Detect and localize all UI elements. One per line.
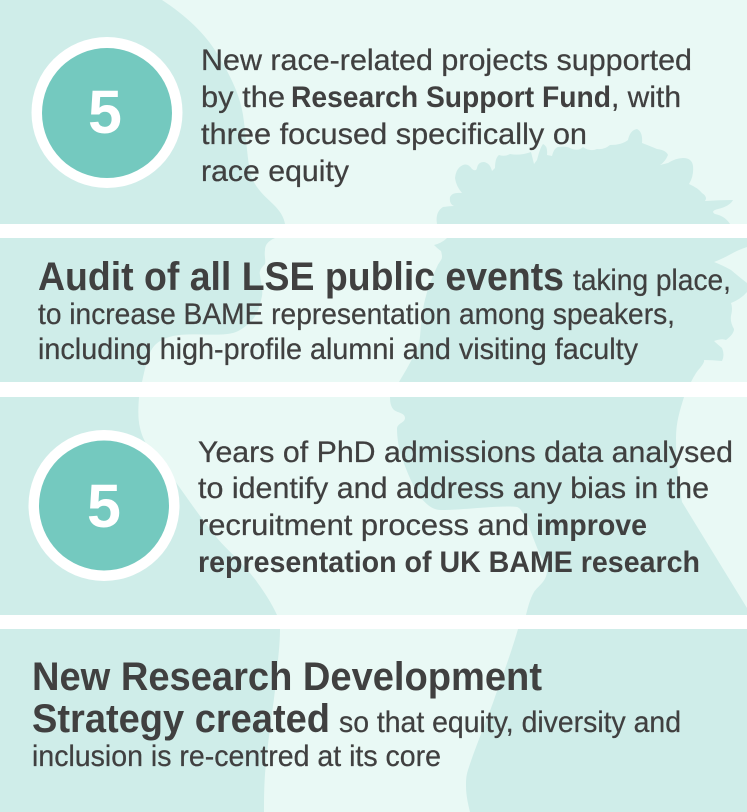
panel: audit of public events (0, 238, 747, 382)
text: phd admissions description: recruitment process and (198, 509, 529, 542)
text: research support fund description: by the (201, 81, 285, 114)
text: audit description (38, 298, 675, 366)
text: strategy heading: New Research Development (32, 655, 542, 699)
text: audit heading line: taking place, (573, 264, 731, 297)
text: research support fund description (201, 44, 692, 188)
silhouette: central face and neck (390, 397, 747, 615)
text: research support fund description: New race-related projects supported (201, 44, 692, 77)
stat circle: 5 years (28, 430, 180, 581)
text: strategy heading (32, 655, 542, 741)
silhouette: hair right (399, 238, 747, 382)
silhouette: head outline (0, 0, 285, 224)
text: research support fund description: three focused specifically on (201, 118, 587, 151)
silhouette: hair (437, 129, 733, 224)
text: strategy description: inclusion is re-centred at its core (32, 740, 441, 773)
text: phd admissions description: to identify and address any bias in the (198, 472, 709, 505)
text: strategy description (32, 706, 681, 773)
silhouette: face left (0, 238, 275, 382)
text: research support fund description: Research Support Fund (291, 81, 611, 114)
panel: research support fund (0, 0, 747, 224)
text: research support fund description: race equity (201, 155, 349, 188)
stat circle: 5 years: 5 (87, 472, 121, 540)
text: audit description: to increase BAME representation among speakers, (38, 298, 675, 331)
text: phd admissions description: representation of UK BAME research (198, 546, 700, 579)
silhouette: right shoulder (466, 629, 747, 812)
stat circle: 5 projects: 5 (88, 78, 122, 146)
stat circle: 5 projects (32, 37, 182, 188)
silhouette: left shoulder (0, 629, 280, 812)
panel: research development strategy (0, 629, 747, 812)
text: research support fund description: , with (611, 81, 681, 114)
text: strategy description: so that equity, diversity and (339, 706, 681, 739)
text: phd admissions description (198, 436, 733, 579)
text: strategy heading: Strategy created (32, 697, 330, 741)
silhouette: left figure (0, 397, 277, 615)
text: audit description: including high-profile alumni and visiting faculty (38, 333, 638, 366)
text: audit heading line: Audit of all LSE public events (38, 255, 564, 299)
text: phd admissions description: Years of PhD admissions data analysed (198, 436, 733, 469)
panel: phd admissions data (0, 397, 747, 615)
text: phd admissions description: improve (536, 509, 647, 542)
